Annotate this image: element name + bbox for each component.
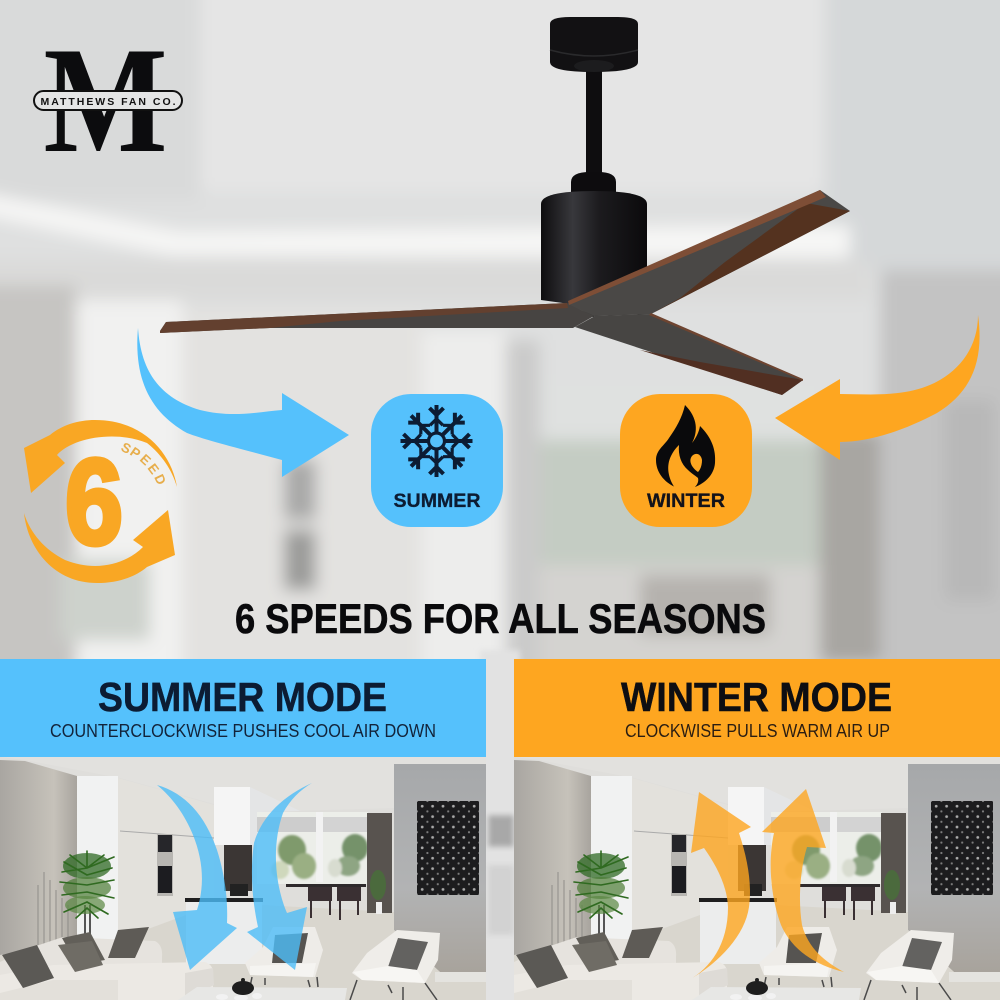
- fan rod: [586, 66, 602, 174]
- speed text: [119, 439, 169, 487]
- arrows: summer cool air down: [157, 783, 312, 970]
- blade: lower right: [575, 313, 803, 395]
- panel: summer mode: [0, 659, 486, 757]
- icon: summer badge: [371, 394, 503, 527]
- speed text: E: [145, 461, 162, 477]
- fan motor: [541, 191, 647, 304]
- title: 6 SPEEDS FOR ALL SEASONS: [235, 595, 766, 642]
- arrows: winter warm air up: [689, 789, 844, 980]
- speed text: S: [119, 439, 134, 457]
- speed text: D: [151, 472, 169, 487]
- label: winter: WINTER: [647, 491, 725, 512]
- icon: six speed: [24, 420, 177, 583]
- ceiling fan: [160, 17, 850, 395]
- speed text: P: [127, 444, 143, 462]
- logo: MATTHEWS FAN CO.: [40, 96, 176, 108]
- heading: summer mode: SUMMER MODE: [98, 674, 387, 720]
- blade: upper right: [568, 190, 850, 316]
- panel: winter mode: [514, 659, 1000, 757]
- heading: winter mode: WINTER MODE: [621, 674, 892, 720]
- arrow: orange winter: [775, 315, 980, 460]
- arrow: blue summer: [137, 328, 349, 477]
- side strip between photos: [480, 650, 520, 1000]
- fan collar: [571, 172, 616, 196]
- text: summer description: COUNTERCLOCKWISE PUSHES COOL AIR DOWN: [50, 721, 436, 741]
- hub backing: [567, 307, 651, 328]
- text: winter description: CLOCKWISE PULLS WARM AIR UP: [625, 721, 890, 741]
- label: summer: SUMMER: [394, 491, 481, 512]
- number 6: 6: [65, 434, 123, 570]
- photo: summer room: [0, 757, 486, 1000]
- speed text: E: [137, 451, 154, 468]
- blade: left: [160, 303, 594, 333]
- logo: M: [44, 16, 168, 184]
- fan canopy: [550, 17, 638, 72]
- photo: winter room: [514, 757, 1000, 1000]
- upper arrow: [24, 420, 177, 493]
- icon: snowflake: [400, 405, 472, 477]
- icon: winter badge: [620, 394, 752, 527]
- lower arrow: [24, 510, 175, 583]
- icon: flame: [656, 405, 715, 488]
